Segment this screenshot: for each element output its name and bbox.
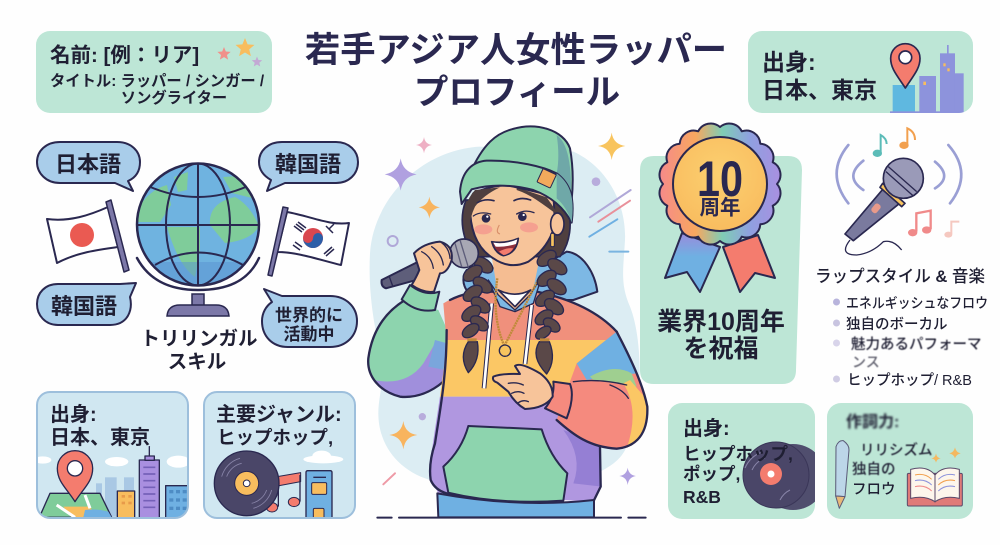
bubble: Japanese: 日本語: [55, 152, 121, 177]
title: [305, 31, 727, 112]
bubble: Korean lower left: 韓国語: [51, 294, 117, 319]
panel: hometown bottom left: [34, 392, 192, 520]
icon: open book: [907, 447, 962, 506]
pointing hand: [493, 365, 553, 409]
panel: main genre bottom left: [204, 392, 355, 521]
bubble: Korean right: [259, 142, 358, 191]
text: rap style and music: [815, 267, 988, 389]
icon: pen: [836, 441, 849, 508]
pocket: [443, 426, 567, 502]
panel: name and title: ソングライター: [121, 89, 227, 107]
bubble: Korean right: 韓国語: [275, 152, 341, 177]
icon: stage microphone with music notes: [837, 128, 961, 255]
sparkles and accents: [383, 133, 636, 485]
text: trilingual skill: トリリンガル: [140, 328, 258, 350]
hair back: [462, 200, 570, 257]
panel: lyricism bottom right: フロウ: [852, 481, 896, 498]
bubble: active worldwide: [262, 289, 357, 347]
panel: genre bottom right: [668, 403, 826, 519]
neck and necklace: [484, 257, 542, 388]
beanie: [460, 126, 573, 223]
list: style bullets: ヒップホップ/ R&B: [847, 372, 972, 389]
icon: ribbon medal: 周年: [700, 196, 740, 220]
panel: genre bottom right: 出身:: [683, 417, 730, 440]
hoodie body: [420, 287, 627, 517]
braid right: [532, 247, 570, 374]
bubble: active worldwide: 世界的に: [275, 306, 343, 325]
right sleeve: [545, 327, 653, 453]
panel: genre bottom right: ヒップホップ,: [683, 444, 793, 464]
floor line: [377, 515, 646, 521]
illustration: rapper character: [360, 126, 653, 518]
panel: lyricism bottom right: 作詞力:: [846, 413, 899, 431]
panel: genre bottom right: ポップ,: [683, 464, 740, 484]
icon: ribbon medal: [660, 124, 780, 292]
face: [464, 185, 564, 265]
icon: globe: [136, 163, 260, 316]
icon: Japan flag: [47, 200, 129, 272]
panel: lyricism bottom right: [827, 403, 973, 519]
panel: main genre bottom left: ヒップホップ,: [217, 427, 333, 448]
panel: main genre bottom left: 主要ジャンル:: [216, 403, 342, 426]
list: style bullets: 魅力あるパフォーマ: [851, 336, 982, 353]
list: style bullets: エネルギッシュなフロウ: [846, 295, 988, 311]
panel: languages: [37, 142, 358, 373]
panel: hometown bottom left: 出身:: [50, 403, 97, 426]
list: style bullets: 独自のボーカル: [846, 316, 948, 333]
panel: anniversary: を祝福: [683, 335, 759, 363]
panel: lyricism bottom right: 独自の: [852, 461, 896, 478]
panel: hometown bottom left: 日本、東京: [50, 426, 150, 449]
panel: anniversary: 業界10周年: [657, 308, 785, 336]
panel: name and title: タイトル: ラッパー / シンガー /: [50, 73, 265, 90]
panel: name and title: 名前: [例：リア]: [50, 44, 199, 67]
text: rap style and music: ラップスタイル & 音楽: [815, 267, 985, 286]
braid left: [459, 254, 496, 373]
bubble: active worldwide: 活動中: [284, 325, 334, 344]
panel: name and title: [36, 31, 272, 113]
hood: [463, 252, 597, 300]
bubble: Japanese: [37, 142, 140, 191]
panel: hometown top right: 出身:: [762, 49, 816, 75]
bubble: Korean lower left: [37, 283, 136, 325]
text: trilingual skill: [140, 328, 258, 373]
left sleeve: [367, 300, 446, 398]
list: style bullets: [833, 295, 988, 389]
panel: hometown top right: [748, 31, 973, 113]
text: trilingual skill: スキル: [168, 351, 226, 373]
microphone in hand: [382, 239, 478, 311]
icon: location pin top right: [891, 44, 920, 88]
panel: lyricism bottom right: リリシズム: [860, 441, 932, 459]
title: 若手アジア人女性ラッパー: [305, 31, 727, 70]
panel: genre bottom right: R&B: [683, 487, 721, 507]
panel: anniversary: [640, 124, 802, 384]
icon: ribbon medal: 10: [697, 151, 743, 207]
panel: hometown top right: 日本、東京: [762, 77, 877, 103]
list: style bullets: ンス: [852, 354, 880, 370]
title: プロフィール: [414, 74, 620, 112]
icon: Korea flag: [268, 207, 349, 276]
